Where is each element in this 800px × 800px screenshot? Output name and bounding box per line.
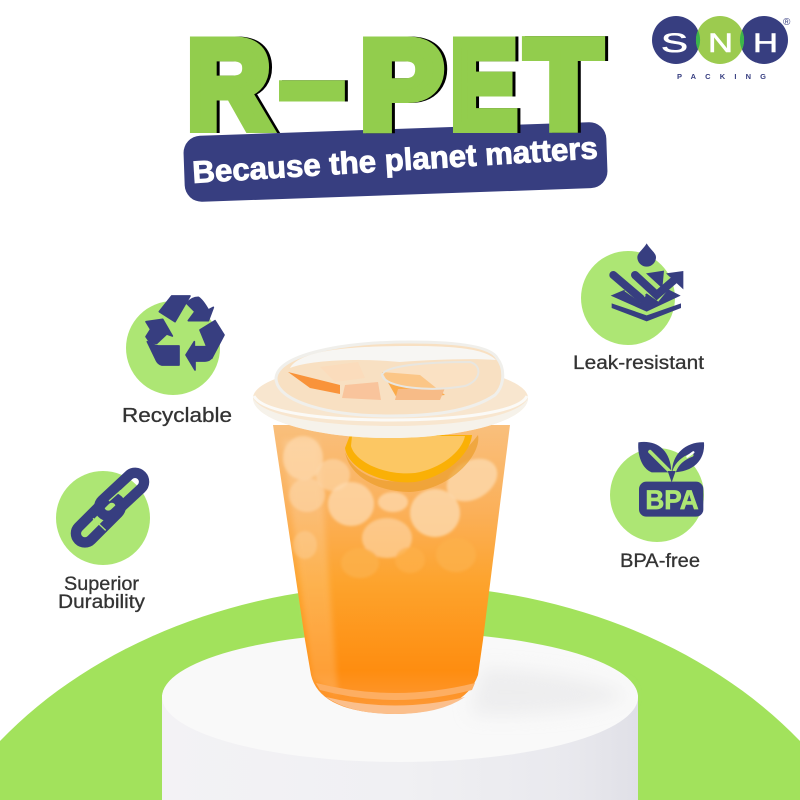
label: superior durability [58, 574, 146, 613]
SNH Packing logo: ® [783, 17, 791, 28]
icon: chain links [72, 469, 148, 546]
sip opening [382, 362, 478, 389]
title: R-PET: P [360, 16, 443, 154]
lid dome [276, 342, 503, 416]
icon: BPA with leaves: BPA [645, 485, 699, 515]
drink seen through lid [288, 372, 340, 394]
title: R-PET: E [454, 15, 520, 154]
title: R-PET: T [529, 16, 604, 155]
green hill background [0, 585, 800, 800]
icon: recycle arrows [146, 296, 224, 370]
label: superior durability: Durability [58, 592, 146, 613]
icon: drop, layers and arrows [611, 243, 683, 321]
title: R-PET: R [190, 16, 273, 154]
SNH Packing logo: PACKING [677, 72, 766, 81]
feature: superior durability [56, 469, 150, 613]
SNH Packing logo [652, 16, 791, 81]
title: R-PET [187, 8, 604, 155]
white pedestal [162, 632, 638, 800]
product: cup of orange iced drink with lid [253, 342, 528, 714]
title: R-PET: R [187, 16, 270, 154]
lid rim [253, 362, 528, 438]
feature: leak-resistant [573, 243, 705, 374]
feature: recyclable [122, 296, 232, 427]
label: recyclable: Recyclable [122, 405, 232, 427]
ice cubes [283, 436, 505, 578]
label: leak-resistant: Leak-resistant [573, 352, 705, 374]
title: R-PET: T [526, 16, 601, 155]
lemon slice [345, 435, 478, 492]
SNH Packing logo: N [708, 28, 733, 58]
banner: because the planet matters [183, 122, 608, 202]
SNH Packing logo: S [661, 28, 688, 58]
banner text: Because the planet matters [191, 130, 599, 190]
SNH Packing logo: H [753, 28, 778, 58]
cup body with juice [273, 425, 510, 714]
label: BPA-free: BPA-free [620, 550, 700, 572]
cup base [316, 683, 475, 700]
title: R-PET: - [279, 8, 351, 151]
title: R-PET: - [276, 8, 348, 151]
title: R-PET: E [451, 15, 517, 154]
label: superior durability: Superior [64, 574, 140, 595]
title: R-PET: P [363, 16, 446, 154]
feature: BPA-free [610, 442, 704, 572]
